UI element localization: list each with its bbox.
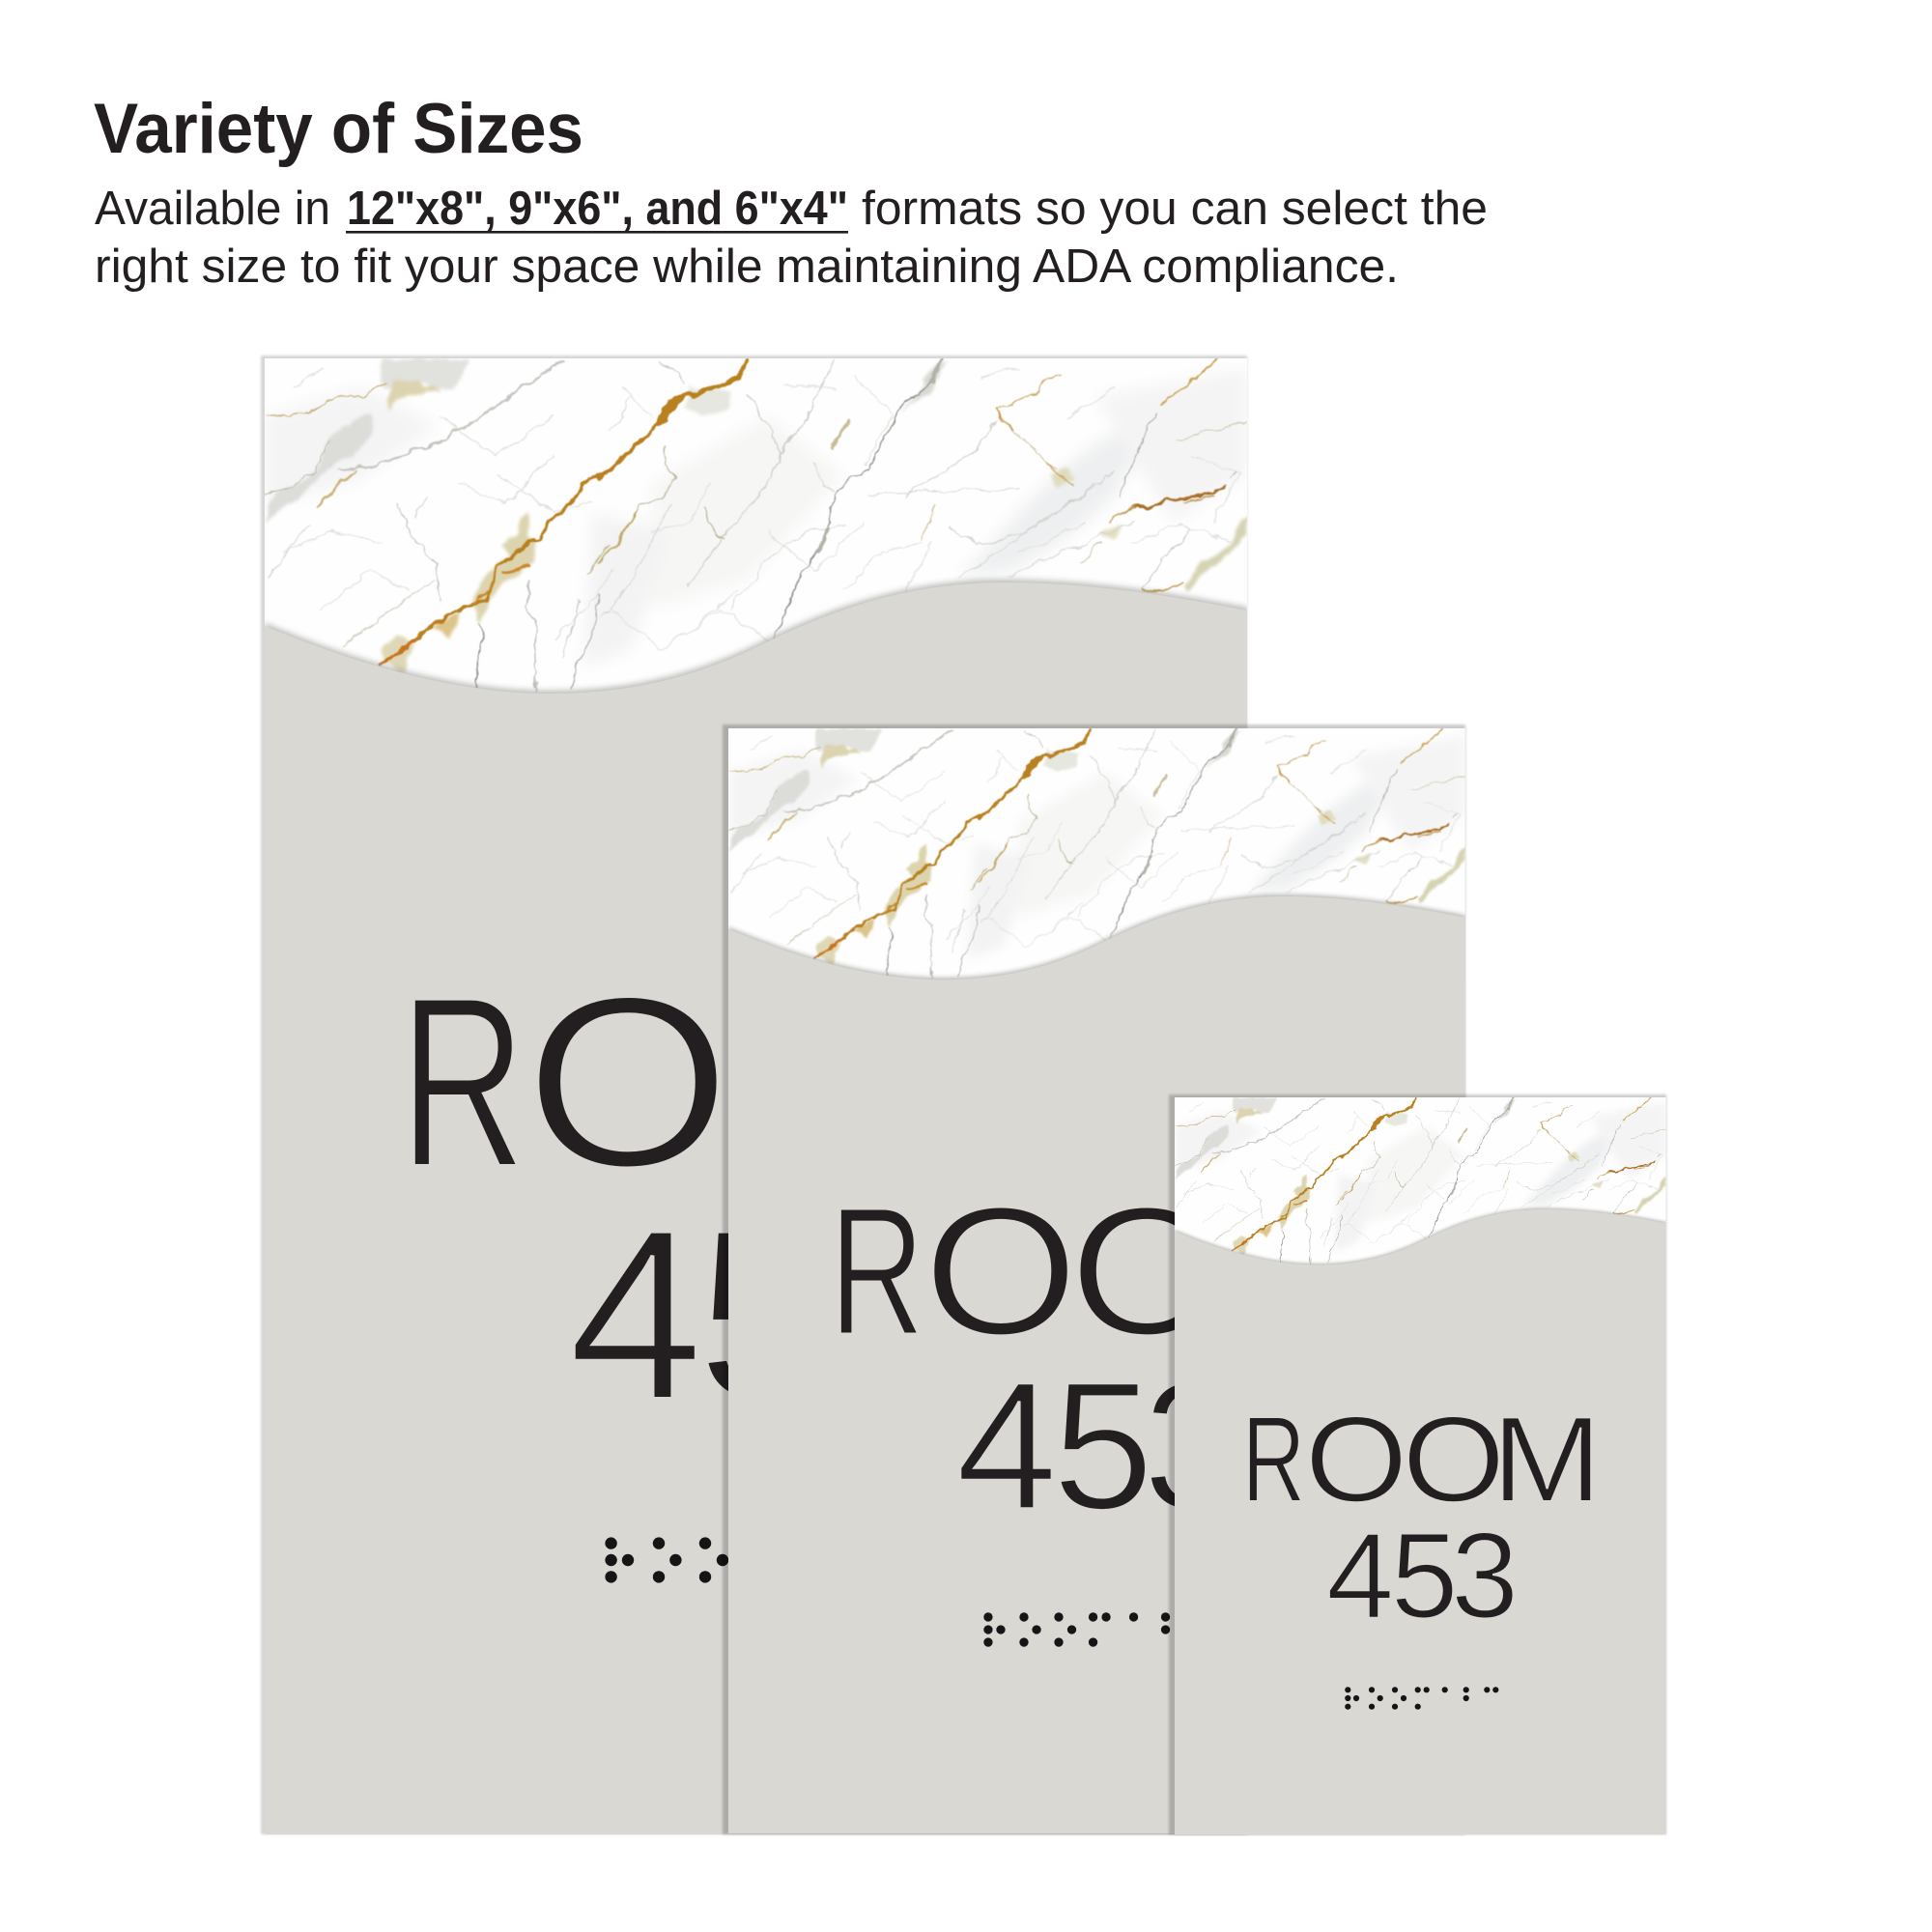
grey body with wave edge [728,896,1465,1833]
marble top [728,728,1466,989]
room label: OOM [525,946,1120,1218]
wave shadow [1175,1208,1666,1269]
panel: small 6x4 sign [1175,1097,1666,1834]
description text: 12"x8", 9"x6", and 6"x4" [347,183,848,235]
title: Variety of Sizes [94,90,583,168]
wave shadow [265,580,1248,703]
room label: R [1242,1393,1305,1528]
panel: large 12x8 sign [265,358,1248,1834]
wave shadow [728,895,1466,987]
description text: right size to fit your space while maintaining ADA compliance. [95,241,1399,293]
braille dots [983,1612,1214,1647]
sign shadow: medium [723,724,1465,1834]
room label: OOM [1305,1391,1602,1527]
braille dots [1345,1687,1498,1710]
room number: 453 [568,1179,952,1451]
marble top [1175,1097,1666,1271]
room label: R [830,1169,924,1373]
room number: 453 [956,1345,1244,1548]
grey body with wave edge [265,582,1247,1834]
room number: 453 [1326,1507,1519,1644]
sign shadow: large [261,355,1247,1834]
description text [95,183,1488,293]
room label: R [400,946,526,1218]
marble top [265,358,1248,706]
sign shadow: small [1169,1094,1666,1834]
room label: OOM [923,1169,1370,1373]
braille dots [605,1537,913,1583]
grey body with wave edge [1175,1209,1665,1834]
description text: formats so you can select the [862,183,1488,235]
panel: medium 9x6 sign [728,728,1466,1833]
description text: Available in [95,183,330,235]
